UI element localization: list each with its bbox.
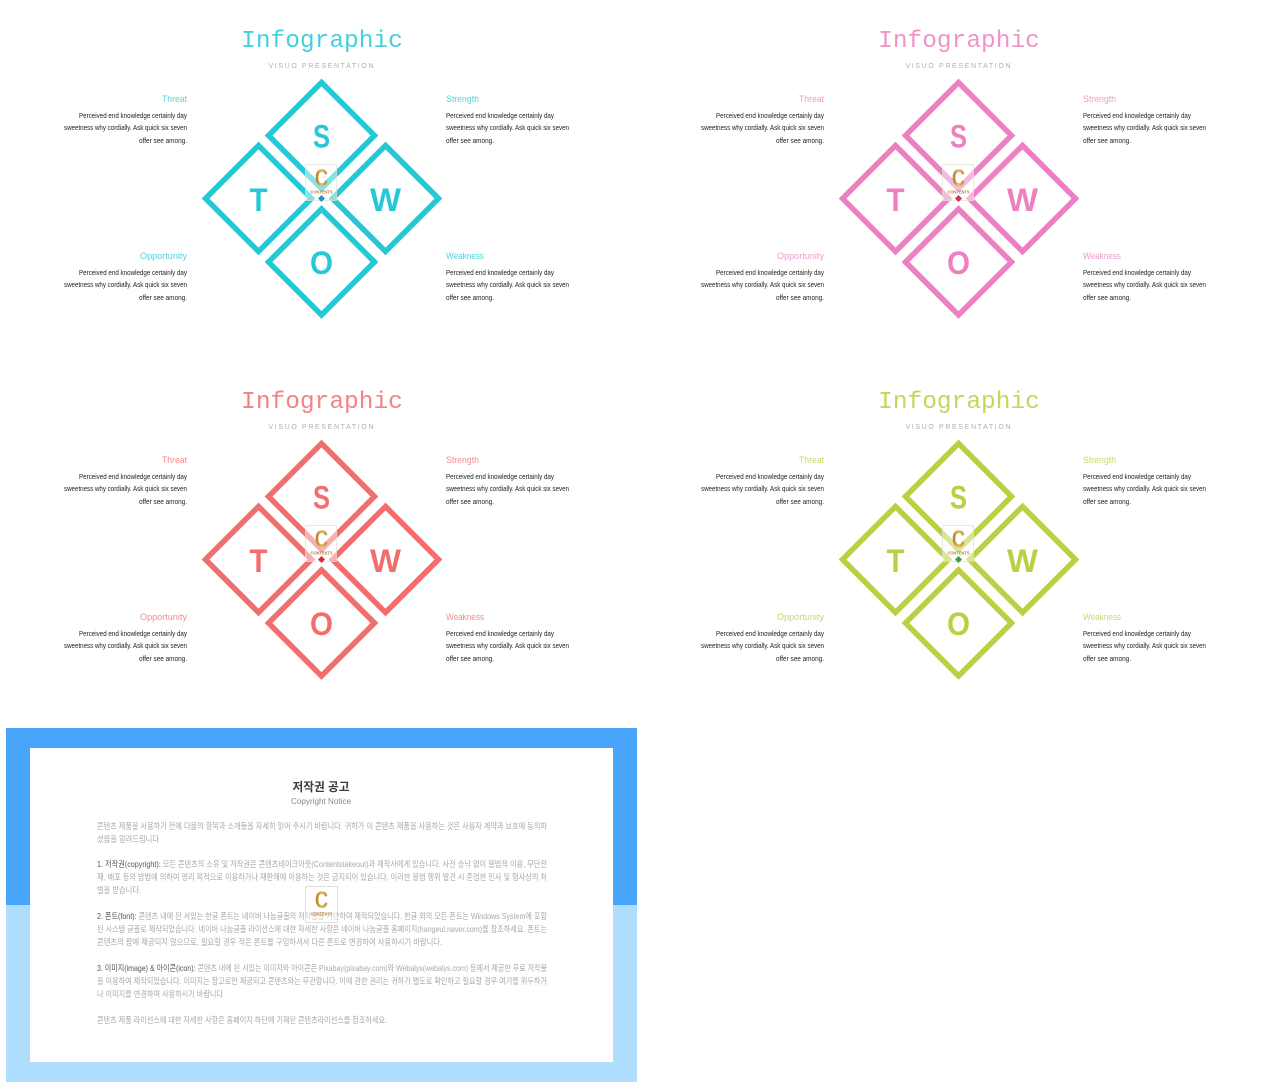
text block: opportunity: offer see among.	[776, 293, 824, 302]
text block: intro: 콘텐츠 제품을 사용하기 전에 다음의 항목과 소개들을 자세히 읽어 주시기 바랍니다. 귀하가 이 콘텐츠 제품을 사용하는 것은 사용자 계약과 보호에 동의하	[97, 821, 547, 831]
watermark logo	[942, 164, 974, 202]
text block: strength: Strength	[1083, 455, 1116, 465]
text block: copyright clause	[97, 859, 547, 895]
text block: threat	[701, 455, 824, 506]
text block: opportunity	[64, 251, 187, 302]
text block: opportunity: Perceived end knowledge certainly day	[79, 629, 187, 638]
text block: threat: Threat	[162, 94, 187, 104]
diamond: W	[970, 146, 1076, 252]
diamond: S: S	[313, 118, 330, 154]
diamond: O: O	[947, 245, 970, 281]
text block: copyright clause: 벌을 받습니다.	[97, 885, 141, 895]
watermark logo: CONTENTS	[310, 550, 332, 556]
diamond: S	[906, 82, 1012, 188]
text block: font clause: 콘텐츠의 팜에 제공되지 않으므로, 필요할 경우 적은 폰트를 구입하셔서 다른 폰트로 변경하여 사용하시기 바랍니다.	[97, 937, 442, 947]
text block: strength: offer see among.	[446, 136, 494, 145]
text block: threat: sweetness why cordially. Ask quick six seven	[64, 484, 187, 493]
text block: opportunity: Perceived end knowledge certainly day	[716, 268, 824, 277]
diamond: T	[842, 506, 948, 612]
text block: opportunity: offer see among.	[139, 293, 187, 302]
diamond: W: W	[1007, 543, 1039, 579]
frame: light blue lower band	[6, 905, 637, 1082]
title: Infographic	[241, 389, 403, 416]
text block: weakness: Weakness	[446, 251, 484, 261]
watermark logo: CONTENTS	[310, 190, 332, 194]
text block: weakness: sweetness why cordially. Ask quick six seven	[446, 280, 569, 289]
watermark logo: C	[952, 165, 965, 192]
text block: strength: sweetness why cordially. Ask quick six seven	[1083, 123, 1206, 132]
text block: copyright clause: 1. 저작권(copyright): 모든 콘텐츠의 소유 및 저작권은 콘텐츠테이크아웃(Contentstakeout)과 제작사에게 있습니다. 사전 승낙 없이 불법적 이용, 무단전	[97, 859, 547, 869]
text block: opportunity	[64, 612, 187, 663]
text block: font clause	[97, 911, 547, 947]
diamond: W	[332, 506, 438, 612]
text block: threat: sweetness why cordially. Ask quick six seven	[701, 484, 824, 493]
diamond: S: S	[950, 118, 967, 154]
text block: strength: offer see among.	[1083, 497, 1131, 506]
diamond: T: T	[250, 182, 268, 218]
text block: weakness: sweetness why cordially. Ask quick six seven	[1083, 641, 1206, 650]
text block: opportunity: sweetness why cordially. Ask quick six seven	[64, 641, 187, 650]
text block: strength: Strength	[446, 94, 479, 104]
watermark logo	[306, 526, 336, 563]
text block: weakness: Weakness	[1083, 251, 1121, 261]
watermark logo	[306, 164, 336, 202]
text block: weakness: offer see among.	[1083, 654, 1131, 663]
text block: threat	[64, 455, 187, 506]
text block: strength: Strength	[446, 455, 479, 465]
watermark logo: CONTENTS	[948, 550, 970, 556]
text block: threat: offer see among.	[776, 136, 824, 145]
watermark logo	[942, 526, 974, 563]
diamond: S	[268, 82, 374, 188]
watermark logo: C	[315, 526, 328, 553]
text block: weakness: sweetness why cordially. Ask quick six seven	[1083, 280, 1206, 289]
text block: strength: sweetness why cordially. Ask quick six seven	[1083, 484, 1206, 493]
diamond: O	[906, 209, 1012, 315]
watermark logo: C	[315, 165, 328, 192]
text block: opportunity: Opportunity	[777, 251, 824, 261]
text block: image clause	[97, 963, 547, 999]
diamond: W	[332, 146, 438, 252]
text block: opportunity: Opportunity	[140, 612, 187, 622]
panel: red SWOT	[64, 389, 569, 676]
text block: strength: Perceived end knowledge certainly day	[446, 472, 554, 481]
text block: weakness: Weakness	[1083, 612, 1121, 622]
text block: weakness	[1083, 251, 1206, 302]
text block: weakness: Perceived end knowledge certainly day	[446, 629, 554, 638]
subtitle: VISUO PRESENTATION	[268, 424, 374, 431]
subtitle: VISUO PRESENTATION	[906, 424, 1010, 431]
diamond: S: S	[313, 480, 330, 516]
text block: intro	[97, 821, 547, 844]
text block: weakness: offer see among.	[446, 293, 494, 302]
text block: threat	[701, 94, 824, 145]
text block: weakness: Perceived end knowledge certainly day	[1083, 629, 1191, 638]
title: Infographic	[241, 28, 403, 55]
subheading: Copyright Notice	[291, 796, 351, 806]
text block: threat: offer see among.	[139, 497, 187, 506]
text block: strength	[1083, 94, 1206, 145]
text block: weakness	[1083, 612, 1206, 663]
panel: teal SWOT	[64, 28, 569, 315]
subtitle: VISUO PRESENTATION	[268, 63, 374, 70]
watermark logo: CONTENTS	[310, 912, 332, 916]
diamond: T	[842, 146, 948, 252]
text block: threat: offer see among.	[139, 136, 187, 145]
diamond: W: W	[1007, 182, 1039, 218]
text block: strength: Perceived end knowledge certainly day	[1083, 472, 1191, 481]
panel: green SWOT	[701, 389, 1206, 676]
text block: weakness: offer see among.	[446, 654, 494, 663]
diamond: T	[206, 146, 312, 252]
title: Infographic	[878, 389, 1040, 416]
subtitle: VISUO PRESENTATION	[906, 63, 1010, 70]
text block: image clause: 나 이미지를 변경하여 사용하시기 바랍니다.	[97, 989, 225, 999]
text block: opportunity: Opportunity	[777, 612, 824, 622]
diamond: O: O	[947, 606, 970, 642]
diamond: S	[906, 444, 1012, 550]
text block: opportunity: Opportunity	[140, 251, 187, 261]
heading: 저작권 공고	[292, 779, 350, 794]
text block: strength: Perceived end knowledge certainly day	[446, 111, 554, 120]
text block: strength	[1083, 455, 1206, 506]
text block: font clause: 된 시스템 글꼴로 제작되었습니다. 네이버 나눔글꼴 라이선스에 대한 자세한 사항은 네이버 나눔글꼴 홈페이지(hangeul.naver.com)를 참조하세요. 폰트는	[97, 924, 547, 934]
panel: copyright notice	[6, 728, 637, 1082]
diamond: W	[970, 506, 1076, 612]
text block: opportunity: sweetness why cordially. Ask quick six seven	[64, 280, 187, 289]
text block: weakness: offer see among.	[1083, 293, 1131, 302]
text block: threat	[64, 94, 187, 145]
text block: threat: Perceived end knowledge certainly day	[79, 111, 187, 120]
text block: threat: Threat	[799, 94, 824, 104]
text block: strength: offer see among.	[1083, 136, 1131, 145]
text block: threat: offer see among.	[776, 497, 824, 506]
text block: threat: Perceived end knowledge certainly day	[716, 472, 824, 481]
panel: pink SWOT	[701, 28, 1206, 315]
text block: opportunity: Perceived end knowledge certainly day	[79, 268, 187, 277]
text block: opportunity: offer see among.	[139, 654, 187, 663]
white sheet	[30, 748, 613, 1062]
title: Infographic	[878, 28, 1040, 55]
watermark logo: C	[315, 887, 328, 914]
text block: weakness: Perceived end knowledge certainly day	[446, 268, 554, 277]
text block: opportunity: sweetness why cordially. Ask quick six seven	[701, 641, 824, 650]
text block: image clause: 을 이용하여 제작되었습니다. 이미지는 참고로만 제공되고 콘텐츠와는 무관합니다. 이에 관한 권리는 귀하가 별도로 확인하고 필요할 경우 여기를 위두하거	[97, 976, 547, 986]
text block: strength	[446, 455, 569, 506]
text block: threat: Perceived end knowledge certainly day	[716, 111, 824, 120]
text block: weakness	[446, 612, 569, 663]
text block: license note: 콘텐츠 제품 라이선스에 대한 자세한 사항은 홈페이지 하단에 기재된 콘텐츠라이선스를 참조하세요.	[97, 1015, 387, 1025]
text block: weakness: Perceived end knowledge certainly day	[1083, 268, 1191, 277]
diamond: S: S	[950, 480, 967, 516]
text block: threat: Threat	[162, 455, 187, 465]
text block: strength: sweetness why cordially. Ask quick six seven	[446, 484, 569, 493]
text block: threat: Threat	[799, 455, 824, 465]
watermark logo: C	[952, 526, 965, 553]
text block: strength: offer see among.	[446, 497, 494, 506]
text block: intro: 셨음을 알려드립니다.	[97, 834, 161, 844]
diamond: O	[268, 209, 374, 315]
text block: opportunity	[701, 251, 824, 302]
watermark logo: CONTENTS	[948, 190, 970, 194]
text block: image clause: 3. 이미지(image) & 아이콘(icon): 콘텐츠 내에 된 서있는 이미지와 아이콘은 Pixabay(pixabay.com)와 Webalys(webalys.com) 등에서 제공한 무료 저작물	[97, 963, 547, 973]
text block: weakness: sweetness why cordially. Ask quick six seven	[446, 641, 569, 650]
diamond: T: T	[886, 543, 905, 579]
text block: strength: Strength	[1083, 94, 1116, 104]
text block: opportunity: Perceived end knowledge certainly day	[716, 629, 824, 638]
diamond: S	[268, 444, 374, 550]
diamond: W: W	[370, 543, 402, 579]
text block: threat: sweetness why cordially. Ask quick six seven	[64, 123, 187, 132]
text block: font clause: 2. 폰트(font): 콘텐츠 내에 된 서있는 한글 폰트는 네이버 나눔글꼴의 저작물을 기반하여 제작되었습니다. 한글 외의 모든 폰트는 Windows System에 포함	[97, 911, 547, 921]
diamond: O	[906, 570, 1012, 676]
diamond: O: O	[310, 606, 333, 642]
text block: strength: Perceived end knowledge certainly day	[1083, 111, 1191, 120]
diamond: O	[268, 570, 374, 676]
diamond: T: T	[886, 182, 905, 218]
text block: opportunity: offer see among.	[776, 654, 824, 663]
diamond: O: O	[310, 245, 333, 281]
diamond: T	[206, 506, 312, 612]
text block: opportunity: sweetness why cordially. Ask quick six seven	[701, 280, 824, 289]
diamond: W: W	[370, 182, 402, 218]
watermark logo	[306, 886, 338, 922]
text block: strength: sweetness why cordially. Ask quick six seven	[446, 123, 569, 132]
text block: weakness: Weakness	[446, 612, 484, 622]
text block: weakness	[446, 251, 569, 302]
text block: threat: sweetness why cordially. Ask quick six seven	[701, 123, 824, 132]
text block: threat: Perceived end knowledge certainly day	[79, 472, 187, 481]
frame: blue upper band	[6, 728, 637, 905]
text block: copyright clause: 재, 배포 등의 방법에 의하여 영리 목적으로 이용하거나 재판매에 이용하는 것은 금지되어 있습니다. 이러한 불법 행위 발견 시 준엄한 민사 및 형사상의 처	[97, 872, 547, 882]
text block: strength	[446, 94, 569, 145]
text block: opportunity	[701, 612, 824, 663]
diamond: T: T	[250, 543, 268, 579]
